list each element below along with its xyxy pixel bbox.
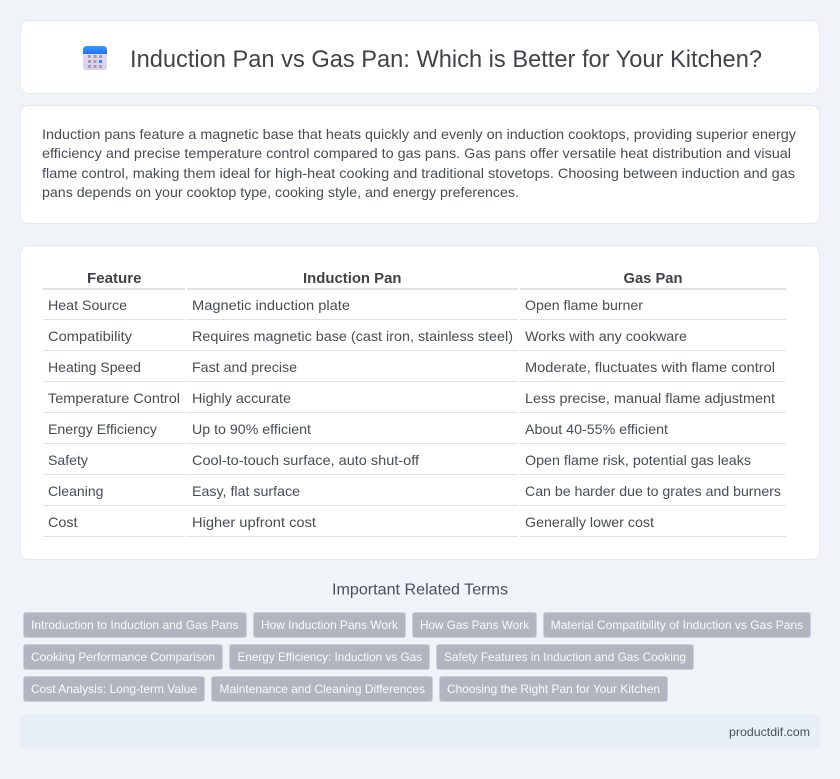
row: safety: Safety [48,452,88,468]
chip: Material Compatibility of Induction vs Gas Pans [551,618,803,632]
chip: Cooking Performance Comparison [31,650,215,664]
row: temperature control [48,390,775,406]
row: cost: Cost [48,514,78,530]
chip: How Induction Pans Work [261,618,399,632]
chip [24,612,246,638]
chip [544,612,810,638]
chip: Cost Analysis: Long-term Value [31,682,197,696]
table header: Gas Pan [624,270,682,287]
chip [24,644,222,670]
row: heat source [48,297,643,313]
intro text: efficiency and precise temperature control compared to gas pans. Gas pans offer versatile heat distribution and visual [42,145,791,161]
row: energy efficiency: Up to 90% efficient [192,421,311,437]
chip [254,612,406,638]
row: cost: Higher upfront cost [192,514,316,530]
row: heating speed: Heating Speed [48,359,141,375]
row: energy efficiency [48,421,668,437]
chip [436,644,694,670]
row: compatibility: Requires magnetic base (cast iron, stainless steel) [192,328,513,344]
row: cleaning: Cleaning [48,483,104,499]
heading: related terms: Important Related Terms [332,582,508,598]
intro text: Induction pans feature a magnetic base that heats quickly and evenly on induction cooktops, providing superior energy [42,126,796,142]
intro text [42,126,796,200]
table rules [43,288,786,537]
row: temperature control: Temperature Control [48,390,180,406]
panel: header [20,20,820,94]
row: safety [48,452,751,468]
row: temperature control: Highly accurate [192,390,291,406]
table header: Feature [87,270,142,287]
chip: Safety Features in Induction and Gas Cooking [444,650,686,664]
intro text: flame control, making them ideal for high-heat cooking and traditional stovetops. Choosing between induction and gas [42,165,795,181]
footer source: productdif.com [729,725,810,739]
chip [412,612,536,638]
chip: Energy Efficiency: Induction vs Gas [238,650,422,664]
chip: Maintenance and Cleaning Differences [220,682,425,696]
row: temperature control: Less precise, manual flame adjustment [525,390,775,406]
footer band [20,714,820,749]
table header [87,270,682,287]
row: heating speed: Fast and precise [192,359,297,375]
row: safety: Open flame risk, potential gas leaks [525,452,751,468]
row: compatibility: Compatibility [48,328,132,344]
row: compatibility: Works with any cookware [525,328,687,344]
row: cleaning: Can be harder due to grates and burners [525,483,781,499]
intro text: pans depends on your cooktop type, cooking style, and energy preferences. [42,184,519,200]
row: compatibility [48,328,687,344]
row: energy efficiency: Energy Efficiency [48,421,157,437]
row: heating speed [48,359,775,375]
row: heating speed: Moderate, fluctuates with flame control [525,359,775,375]
row: heat source: Open flame burner [525,297,643,313]
related term chips [24,612,810,702]
icon: calendar grid [83,46,107,70]
row: cost: Generally lower cost [525,514,654,530]
chip [212,676,432,702]
row: cleaning: Easy, flat surface [192,483,300,499]
chip: Choosing the Right Pan for Your Kitchen [447,682,660,696]
row: cleaning [48,483,781,499]
panel: comparison table [20,246,820,560]
row: safety: Cool-to-touch surface, auto shut-off [192,452,419,468]
row: heat source: Heat Source [48,297,127,313]
title: Induction Pan vs Gas Pan: Which is Better for Your Kitchen? [130,46,762,73]
chip [230,644,430,670]
row: cost [48,514,654,530]
table header: Induction Pan [303,270,402,287]
chip: Introduction to Induction and Gas Pans [31,618,239,632]
chip: How Gas Pans Work [420,618,530,632]
chip [24,676,204,702]
row: heat source: Magnetic induction plate [192,297,350,313]
chip [440,676,668,702]
panel: introduction [20,106,820,224]
row: energy efficiency: About 40-55% efficient [525,421,668,437]
